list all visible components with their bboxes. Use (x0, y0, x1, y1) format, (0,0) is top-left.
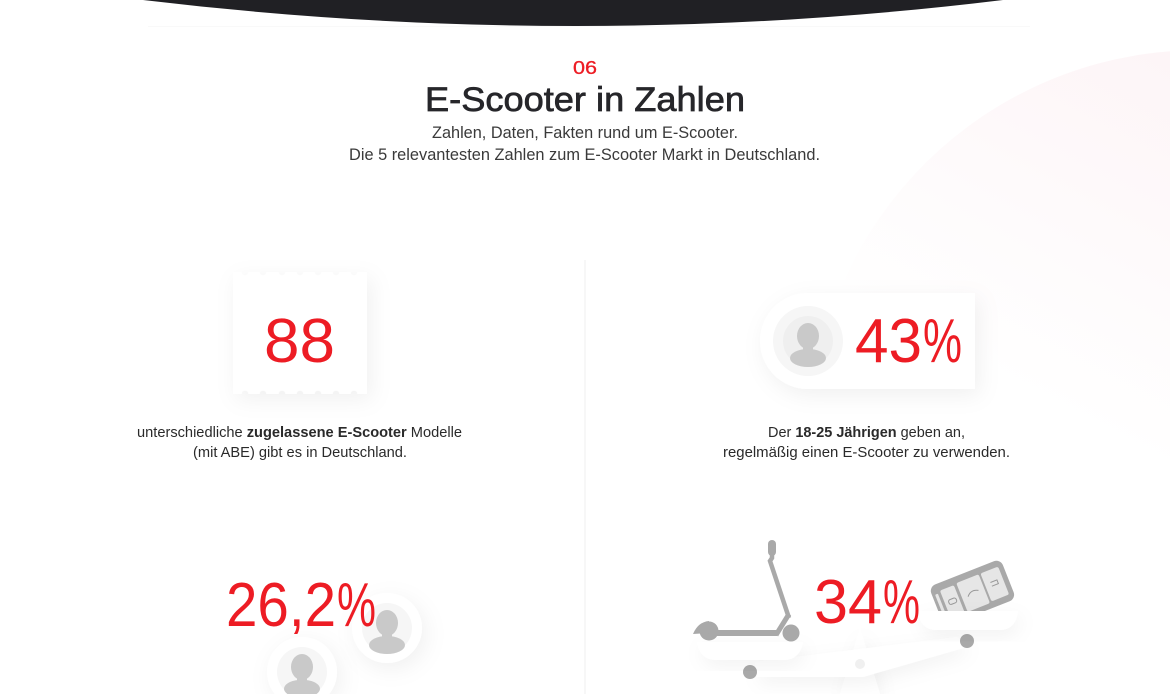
section number: 06 (573, 58, 597, 78)
number 34%: % (883, 568, 920, 637)
icon: e-scooter (693, 544, 800, 642)
number 43% (855, 307, 962, 376)
panel: 26,2 percent (226, 571, 422, 694)
description: (mit ABE) gibt es in Deutschland. (193, 445, 407, 461)
left pan (697, 642, 803, 660)
number 43%: % (923, 307, 962, 376)
icon: key fob (929, 559, 1016, 627)
icon: person (773, 306, 843, 376)
description: Der 18-25 Jährigen geben an, (768, 425, 965, 441)
description (723, 425, 1010, 461)
pill card (760, 293, 975, 389)
intro text: Zahlen, Daten, Fakten rund um E-Scooter. (432, 124, 738, 142)
description: unterschiedliche zugelassene E-Scooter Modelle (137, 425, 462, 441)
number 26,2%: % (337, 571, 376, 640)
number 34% (814, 568, 920, 637)
number 43%: 43 (855, 307, 922, 376)
panel: 88 models (137, 272, 462, 461)
ticket card (233, 272, 367, 394)
right pan (918, 611, 1018, 630)
number 34%: 34 (814, 568, 882, 637)
panel: 43 percent (723, 293, 1010, 461)
right ball (960, 634, 974, 648)
intro text: Die 5 relevantesten Zahlen zum E-Scooter Markt in Deutschland. (349, 146, 820, 164)
panel: 34 percent scale (693, 544, 1018, 694)
icon: person right (352, 593, 422, 663)
scale stand (840, 628, 880, 694)
intro text (349, 124, 820, 164)
title: E-Scooter in Zahlen (425, 81, 745, 119)
dark top arc (143, 0, 1003, 26)
background blob (810, 51, 1170, 610)
scale beam (755, 637, 967, 677)
number 88: 88 (264, 307, 335, 376)
scale pivot (855, 659, 865, 669)
description (137, 425, 462, 461)
number 26,2%: 26,2 (226, 571, 336, 640)
icon: person left (267, 637, 337, 694)
left ball (743, 665, 757, 679)
description: regelmäßig einen E-Scooter zu verwenden. (723, 445, 1010, 461)
